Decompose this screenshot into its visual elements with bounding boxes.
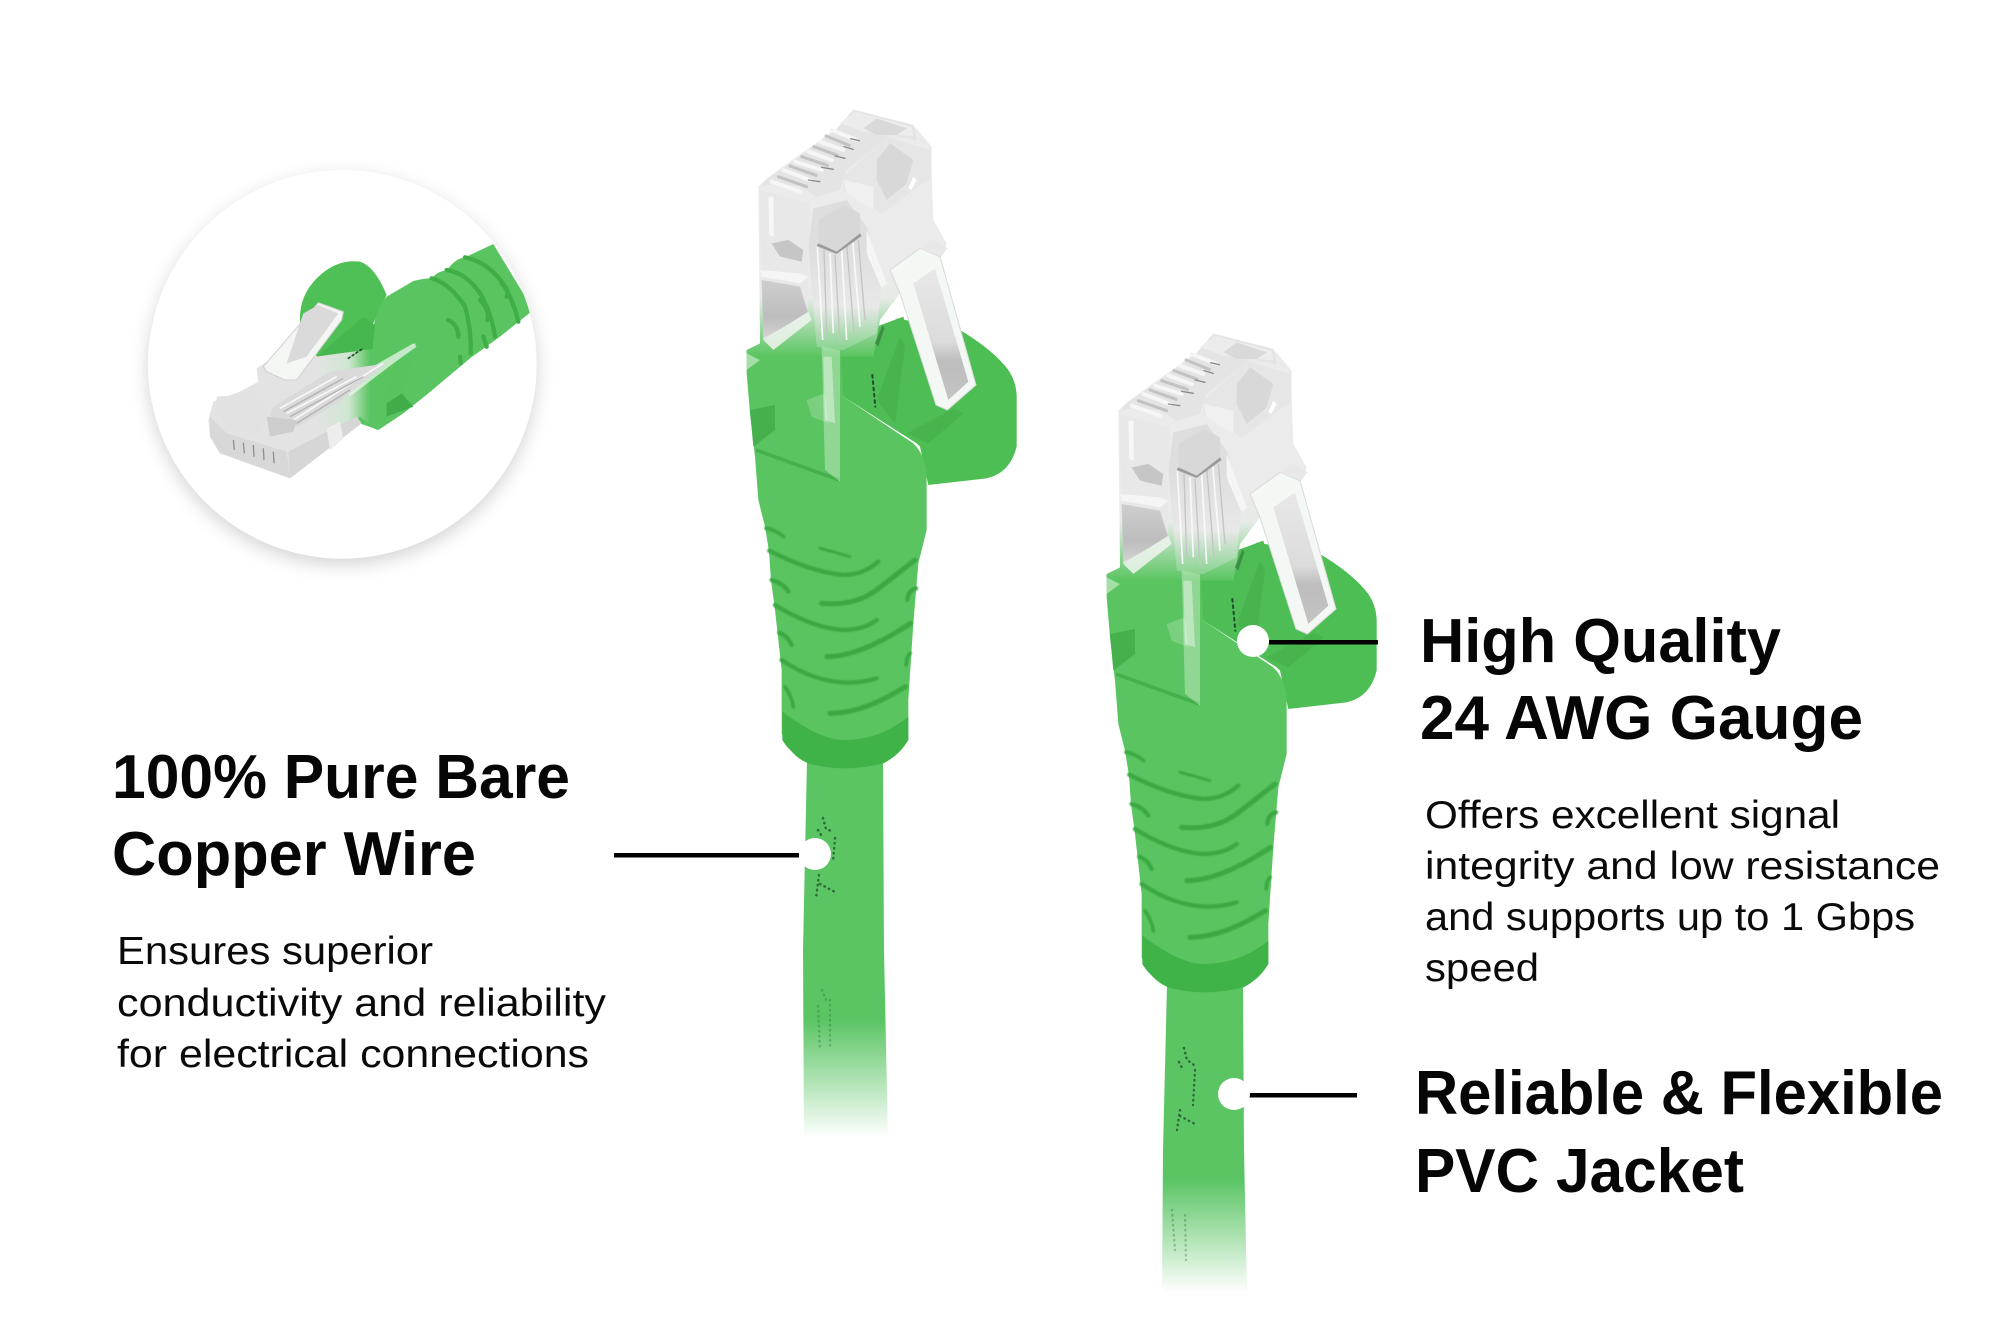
close-up fin [300,261,387,363]
close-up clear body [208,343,417,478]
heading line 2: Copper Wire [112,820,476,889]
heading line 2: PVC Jacket [1415,1137,1744,1206]
close-up clear strip [343,343,417,397]
description line 2: integrity and low resistance [1425,845,1940,888]
close-up boot [343,244,533,430]
leader line: copper wire [614,853,799,858]
cable jacket right [1162,984,1247,1295]
heading: copper wire: 100% Pure Bare [112,743,570,812]
callout: copper wire [112,743,831,1076]
description line 4: speed [1425,947,1539,990]
jacket print right [1172,1048,1195,1260]
close-up front contacts [210,417,290,478]
close-up underside [288,417,362,478]
heading: gauge: High Quality [1420,607,1782,676]
inset disc [148,170,537,559]
close-up lever [263,303,343,380]
callout: gauge [1237,607,1940,990]
connector right [1107,333,1377,992]
jacket print left [816,818,835,1050]
cable left [747,109,1017,1140]
heading line 2: 24 AWG Gauge [1420,684,1863,753]
description line 2: conductivity and reliability [117,982,607,1025]
description line 3: for electrical connections [117,1033,589,1076]
inset circle: connector close-up [148,170,537,559]
close-up grooves [432,257,518,363]
description line 1: Offers excellent signal [1425,794,1840,837]
marker dot: copper wire [799,838,831,870]
description line 3: and supports up to 1 Gbps [1425,896,1915,939]
cable right [1107,333,1377,1295]
marker dot: gauge [1237,625,1269,657]
close-up dots [348,349,362,358]
close-up streaks [270,363,387,427]
leader line: gauge [1269,640,1378,644]
callout: jacket [1218,1059,1943,1206]
leader line: jacket [1249,1093,1357,1098]
marker dot: jacket [1218,1078,1250,1110]
cable jacket left [803,760,888,1140]
description line 1: Ensures superior [117,930,433,973]
connector left [747,109,1017,768]
heading: jacket: Reliable & Flexible [1415,1059,1943,1128]
close-up connector [208,244,533,478]
